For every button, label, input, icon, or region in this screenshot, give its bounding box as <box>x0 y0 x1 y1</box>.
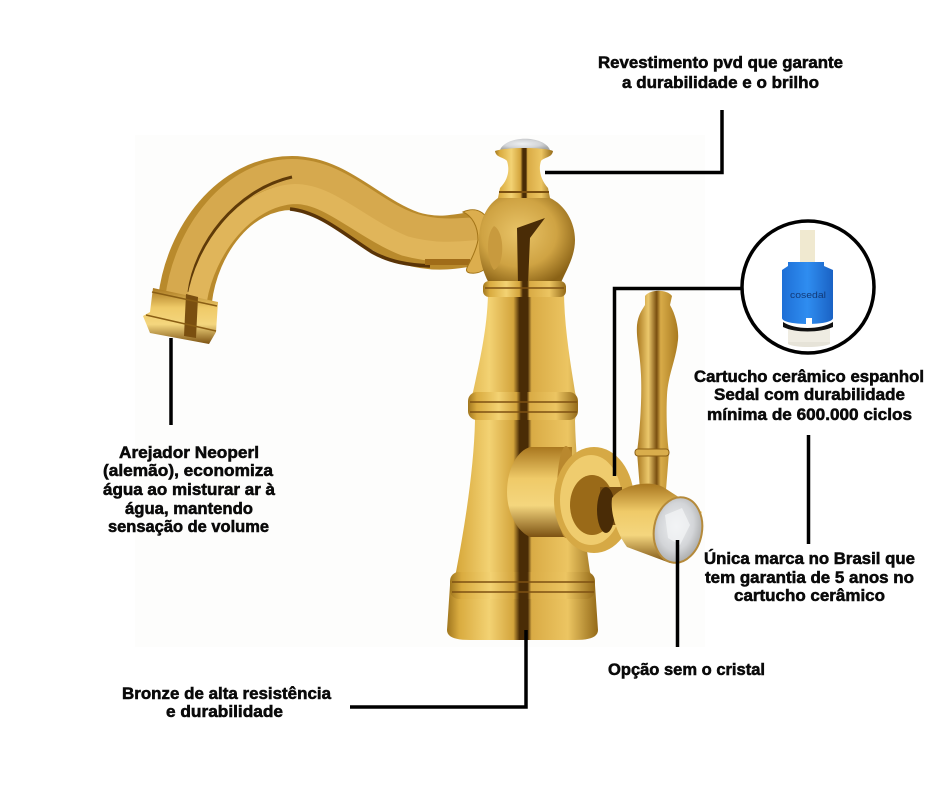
label: warranty: cartucho cerâmico <box>734 587 885 605</box>
handle knob <box>612 484 702 563</box>
crystal button <box>649 493 707 567</box>
label: bronze: Bronze de alta resistência <box>122 685 332 703</box>
label: aerator: sensação de volume <box>108 518 269 536</box>
leader line: crystal <box>676 540 679 647</box>
label: coating: a durabilidade e o brilho <box>622 74 819 92</box>
label: coating <box>598 54 843 92</box>
photo backdrop <box>135 135 705 647</box>
label: aerator: água, mantendo <box>125 500 253 518</box>
faucet illustration <box>143 139 707 640</box>
handle ring on lever <box>635 449 669 456</box>
label: warranty: tem garantia de 5 anos no <box>705 569 914 587</box>
label: aerator: Arejador Neoperl <box>119 444 259 462</box>
cartridge callout circle <box>742 221 874 353</box>
label: coating: Revestimento pvd que garante <box>598 54 843 72</box>
leader line: coating <box>545 110 722 172</box>
spout <box>178 172 478 300</box>
label: warranty: Única marca no Brasil que <box>704 549 915 568</box>
label: cartridge: Sedal com durabilidade <box>714 386 905 404</box>
label: bronze: e durabilidade <box>166 703 283 721</box>
ball body <box>479 198 575 285</box>
label: crystal option: Opção sem o cristal <box>608 661 765 679</box>
lever handle <box>637 291 678 490</box>
label: warranty <box>704 549 915 605</box>
neck and main body <box>447 290 598 640</box>
label: aerator <box>103 444 276 536</box>
leader line: cartridge <box>614 288 742 476</box>
handle cartridge housing <box>507 446 634 553</box>
label: cartridge: mínima de 600.000 ciclos <box>707 406 912 424</box>
leader line: warranty <box>807 435 810 544</box>
circle frame <box>742 221 874 353</box>
label: aerator: (alemão), economiza <box>103 462 274 480</box>
label: cartridge: Cartucho cerâmico espanhol <box>694 368 924 386</box>
label: aerator: água ao misturar ar à <box>103 481 276 499</box>
spout collar <box>463 210 494 273</box>
label: cartridge <box>694 368 924 424</box>
body bands <box>450 281 595 599</box>
spout nozzle <box>143 288 218 344</box>
top finial with crystal <box>495 139 553 198</box>
icon: ceramic cartridge: cosedal <box>790 290 826 300</box>
leader line: aerator <box>169 338 173 425</box>
label: bronze <box>122 685 332 721</box>
leader line: bronze <box>350 630 526 707</box>
